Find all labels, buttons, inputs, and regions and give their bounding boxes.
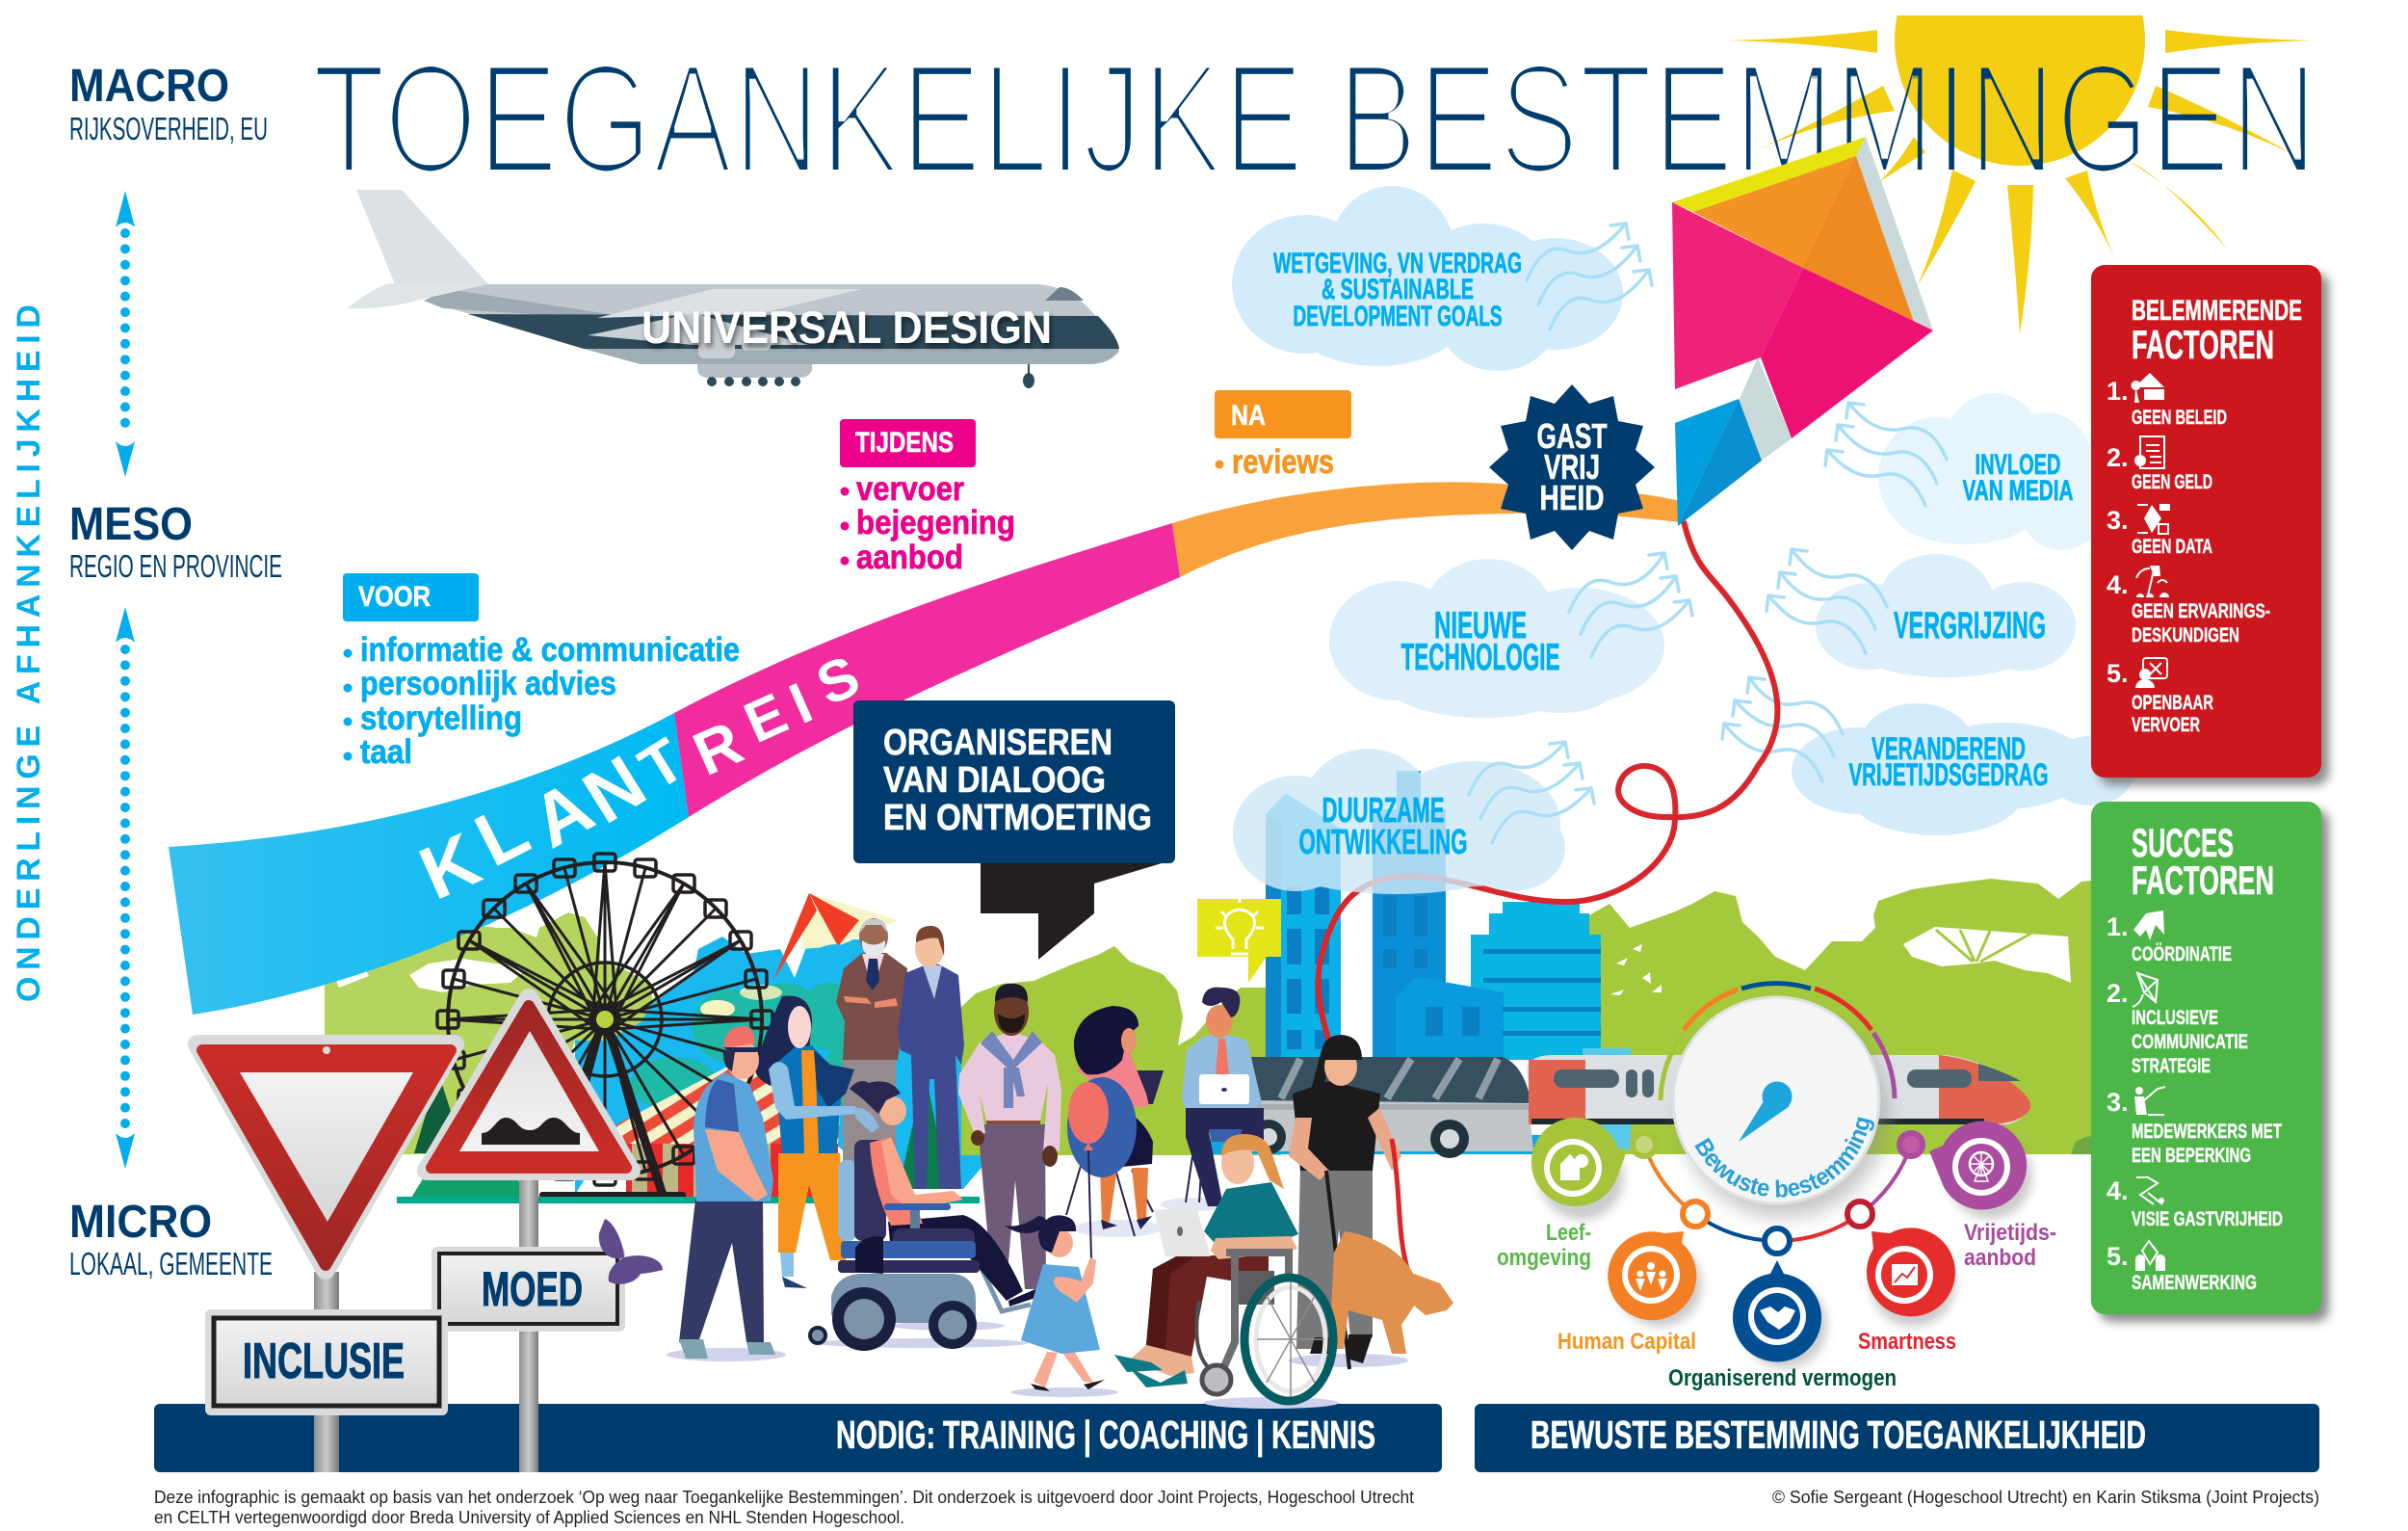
pod: smartness <box>1867 1227 1955 1327</box>
list: voor: persoonlijk advies <box>360 665 616 702</box>
cloud: wetgeving: DEVELOPMENT GOALS <box>1293 301 1503 332</box>
ribbon text: klantreis: E <box>735 680 797 755</box>
ribbon text: klantreis: I <box>780 671 822 736</box>
person: man in pink shirt <box>958 984 1061 1289</box>
ribbon text: klantreis: S <box>807 643 869 718</box>
item 2: inclusieve communicatie strategie: STRATEGIE <box>2132 1055 2211 1077</box>
item 4: geen ervaringsdeskundigen <box>2107 566 2270 647</box>
diagram: outer ring arcs <box>1661 984 1895 1100</box>
sign posts <box>314 1171 538 1472</box>
footer: credits note: Deze infographic is gemaakt op basis van het onderzoek ‘Op weg naar Toegankelijke Bestemmingen’. Dit onderzoek is uitgevoerd door Joint Projects, Hogeschool Utrecht <box>154 1488 1414 1507</box>
panel: belemmerende factoren <box>2091 265 2329 785</box>
item 1: coordinatie: 1. <box>2107 912 2129 941</box>
label: organiserend vermogen: Organiserend vermogen <box>1668 1365 1897 1391</box>
item 3: medewerkers met een beperking: EEN BEPERKING <box>2132 1145 2251 1167</box>
list: voor: informatie & communicatie <box>360 631 740 669</box>
item 1: geen beleid: GEEN BELEID <box>2132 407 2227 429</box>
cloud: wetgeving: WETGEVING, VN VERDRAG <box>1273 248 1522 279</box>
cloud: veranderend vrijetijdsgedrag: VRIJETIJDSGEDRAG <box>1849 757 2048 792</box>
item 4: geen ervaringsdeskundigen: 4. <box>2107 570 2129 599</box>
item 3: medewerkers met een beperking: 3. <box>2107 1088 2129 1117</box>
ribbon text: klantreis: N <box>568 739 660 839</box>
sign: inclusie <box>205 1309 448 1415</box>
buildings: city skyline <box>1211 771 1631 1154</box>
level label: micro <box>69 1197 273 1281</box>
footer: copyright: © Sofie Sergeant (Hogeschool Utrecht) en Karin Stiksma (Joint Projects) <box>1772 1488 2319 1507</box>
level label: macro <box>69 61 268 146</box>
item 5: openbaar vervoer: OPENBAAR <box>2132 692 2213 714</box>
cloud: nieuwe technologie <box>1329 553 1692 718</box>
bar: bewuste bestemming: BEWUSTE BESTEMMING TOEGANKELIJKHEID <box>1531 1412 2146 1457</box>
bar: bewuste bestemming <box>1475 1404 2319 1472</box>
diagram: big circle <box>1680 1010 1888 1218</box>
item 4: geen ervaringsdeskundigen: DESKUNDIGEN <box>2132 624 2239 647</box>
pod: vrijetijdsaanbod <box>1929 1122 2032 1219</box>
ribbon text: klantreis: K <box>407 816 491 916</box>
badge: gastvrijheid: GAST <box>1537 416 1607 456</box>
item 4: visie gastvrijheid: 4. <box>2107 1176 2129 1205</box>
panel heading: SUCCES <box>2132 820 2234 865</box>
item 5: openbaar vervoer: 5. <box>2107 659 2129 688</box>
list: tijdens <box>840 470 1015 576</box>
list: tijdens: vervoer <box>856 470 964 508</box>
item 5: openbaar vervoer: VERVOER <box>2132 714 2200 736</box>
person: seated woman with tablet <box>1066 1006 1164 1259</box>
list: tijdens: aanbod <box>856 539 963 576</box>
sign: moed: MOED <box>482 1262 583 1316</box>
panel: succes factoren <box>2091 802 2329 1322</box>
ribbon text: klantreis <box>407 643 869 916</box>
list: voor: storytelling <box>360 700 522 737</box>
item 4: geen ervaringsdeskundigen: GEEN ERVARINGS- <box>2132 600 2270 622</box>
ribbon: klantreis journey <box>169 482 1681 1015</box>
ribbon text: klantreis: A <box>518 764 607 864</box>
level label: macro: RIJKSOVERHEID, EU <box>69 111 268 146</box>
person: woman in blue jacket <box>755 996 857 1288</box>
diagram: lower arcs <box>1644 1145 1911 1241</box>
tag: na: NA <box>1231 400 1266 432</box>
sun <box>1726 0 2312 334</box>
item 5: openbaar vervoer <box>2107 658 2213 736</box>
ferris wheel <box>437 854 772 1203</box>
cloud: duurzame ontwikkeling: ONTWIKKELING <box>1298 822 1468 861</box>
panel heading: FACTOREN <box>2132 858 2274 903</box>
list: tijdens: bejegening <box>856 504 1015 541</box>
label: vrijetijdsaanbod: Vrijetijds- <box>1964 1220 2056 1246</box>
cloud: duurzame ontwikkeling: DUURZAME <box>1322 790 1445 830</box>
butterfly <box>599 1219 663 1284</box>
bar: nodig: NODIG: TRAINING | COACHING | KENNIS <box>836 1412 1375 1457</box>
person: woman in wheelchair with joystick <box>810 1081 1038 1351</box>
cloud: invloed van media: INVLOED <box>1975 449 2061 481</box>
diagram: nodes <box>1633 1133 1923 1254</box>
badge: gastvrijheid: HEID <box>1539 478 1605 517</box>
person: woman with cane <box>1289 1035 1408 1369</box>
item 2: inclusieve communicatie strategie: 2. <box>2107 979 2129 1008</box>
badge: gastvrijheid: VRIJ <box>1544 447 1600 487</box>
person: man in blue suit <box>898 926 964 1189</box>
list: voor <box>343 631 740 771</box>
item 4: visie gastvrijheid <box>2107 1176 2283 1230</box>
label: leefomgeving: omgeving <box>1497 1245 1591 1271</box>
person: older man in brown suit <box>836 918 907 1164</box>
tag: voor: VOOR <box>358 581 431 613</box>
item 5: samenwerking <box>2107 1241 2257 1294</box>
tag: voor <box>343 573 479 621</box>
ground strip <box>397 1197 980 1203</box>
cloud: nieuwe technologie: NIEUWE <box>1434 605 1527 647</box>
speech bubble: dialogue: EN ONTMOETING <box>883 798 1152 838</box>
item 2: inclusieve communicatie strategie <box>2107 973 2248 1077</box>
cloud: nieuwe technologie: TECHNOLOGIE <box>1400 637 1560 678</box>
cloud: veranderend vrijetijdsgedrag: VERANDEREND <box>1871 731 2026 766</box>
item 2: inclusieve communicatie strategie: INCLUSIEVE <box>2132 1007 2218 1029</box>
level label: meso: MESO <box>69 499 193 550</box>
speech bubble: dialogue: VAN DIALOOG <box>883 760 1106 801</box>
label: smartness: Smartness <box>1858 1329 1956 1355</box>
item 3: medewerkers met een beperking: MEDEWERKERS MET <box>2132 1121 2282 1143</box>
item 3: medewerkers met een beperking <box>2107 1087 2282 1167</box>
arrow: macro to meso <box>116 191 135 477</box>
dog <box>1329 1231 1453 1354</box>
trees: right background <box>1580 879 2100 1154</box>
item 2: geen geld: 2. <box>2107 443 2129 472</box>
label: leefomgeving: Leef- <box>1546 1220 1591 1246</box>
kite <box>1672 137 1933 526</box>
circus tent <box>616 1063 843 1197</box>
item 1: coordinatie: COÖRDINATIE <box>2132 943 2232 965</box>
item 2: geen geld <box>2107 436 2212 493</box>
tag: tijdens <box>840 419 976 467</box>
panel heading: BELEMMERENDE <box>2132 295 2302 327</box>
level label: micro: MICRO <box>69 1197 212 1248</box>
item 5: samenwerking: 5. <box>2107 1242 2129 1271</box>
bar: nodig <box>154 1404 1442 1472</box>
pod: leefomgeving <box>1531 1118 1626 1220</box>
pod: organiserend vermogen <box>1733 1260 1827 1368</box>
ribbon text: klantreis: R <box>683 707 752 789</box>
panel heading <box>2132 820 2274 903</box>
sign: inclusie: INCLUSIE <box>243 1333 405 1389</box>
arrow: meso to micro <box>116 607 135 1169</box>
item 1: coordinatie <box>2107 911 2232 965</box>
lightbulb speech icon <box>1197 896 1281 983</box>
speech bubble: dialogue <box>853 700 1175 960</box>
sign: speed bumps warning <box>427 998 631 1171</box>
list: na: reviews <box>1232 443 1334 481</box>
diagram: pin <box>1739 1081 1792 1142</box>
cloud: vergrijzing <box>1767 549 2076 677</box>
footer: credits note: en CELTH vertegenwoordigd door Breda University of Applied Sciences en NHL Stenden Hogeschool. <box>154 1508 904 1527</box>
person: man with cap <box>667 1026 786 1361</box>
item 3: geen data: 3. <box>2107 506 2129 535</box>
ribbon text: klantreis: L <box>462 786 541 883</box>
level label: meso <box>69 499 282 584</box>
item 3: geen data <box>2107 504 2212 558</box>
cloud: veranderend vrijetijdsgedrag <box>1722 677 2134 835</box>
list: voor: taal <box>360 733 412 771</box>
badge: gastvrijheid <box>1489 384 1655 550</box>
item 5: samenwerking: SAMENWERKING <box>2132 1272 2257 1294</box>
kite tail <box>1319 521 1777 1050</box>
cloud: wetgeving: & SUSTAINABLE <box>1322 274 1474 305</box>
item 2: geen geld: GEEN GELD <box>2132 471 2212 493</box>
ribbon text: klantreis: T <box>627 725 696 804</box>
panel heading: FACTOREN <box>2132 322 2274 367</box>
sign: yield triangle <box>197 1044 455 1270</box>
person: woman in wheelchair <box>1114 1134 1339 1409</box>
diagram: bewuste bestemming <box>1630 981 1925 1256</box>
speech bubble: dialogue: ORGANISEREN <box>883 723 1112 763</box>
cloud: wetgeving <box>1232 186 1652 371</box>
tag: na <box>1215 390 1351 438</box>
item 2: inclusieve communicatie strategie: COMMUNICATIE <box>2132 1031 2248 1053</box>
label: human capital: Human Capital <box>1557 1329 1696 1355</box>
vertical label: ONDERLINGE AFHANKELIJKHEID <box>11 304 47 1002</box>
person: man with laptop <box>1161 988 1264 1211</box>
bus <box>1250 1057 1533 1158</box>
item 3: geen data: GEEN DATA <box>2132 536 2212 558</box>
level label: meso: REGIO EN PROVINCIE <box>69 548 282 584</box>
panel heading <box>2132 295 2302 367</box>
kite: small red <box>773 893 899 983</box>
label: vrijetijdsaanbod: aanbod <box>1964 1245 2036 1271</box>
item 4: visie gastvrijheid: VISIE GASTVRIJHEID <box>2132 1208 2283 1230</box>
footer: credits note <box>154 1488 1414 1527</box>
level label: micro: LOKAAL, GEMEENTE <box>69 1246 273 1281</box>
pod: human capital <box>1608 1231 1702 1327</box>
airplane <box>347 190 1119 388</box>
tag: tijdens: TIJDENS <box>855 427 954 459</box>
level label: macro: MACRO <box>69 61 229 112</box>
sign: moed <box>432 1247 625 1332</box>
airplane label: UNIVERSAL DESIGN <box>641 302 1052 353</box>
cloud: vergrijzing: VERGRIJZING <box>1894 605 2046 647</box>
train <box>1527 1055 2030 1124</box>
item 1: geen beleid: 1. <box>2107 377 2129 406</box>
person: girl with balloon <box>1005 1215 1118 1397</box>
diagram: curved label: Bewuste bestemming <box>1695 1117 1874 1198</box>
scenery: park behind people <box>325 912 1281 1198</box>
cloud: invloed van media <box>1825 393 2100 550</box>
item 1: geen beleid <box>2107 373 2227 429</box>
cloud: duurzame ontwikkeling <box>1233 742 1594 894</box>
cloud: invloed van media: VAN MEDIA <box>1963 475 2073 507</box>
